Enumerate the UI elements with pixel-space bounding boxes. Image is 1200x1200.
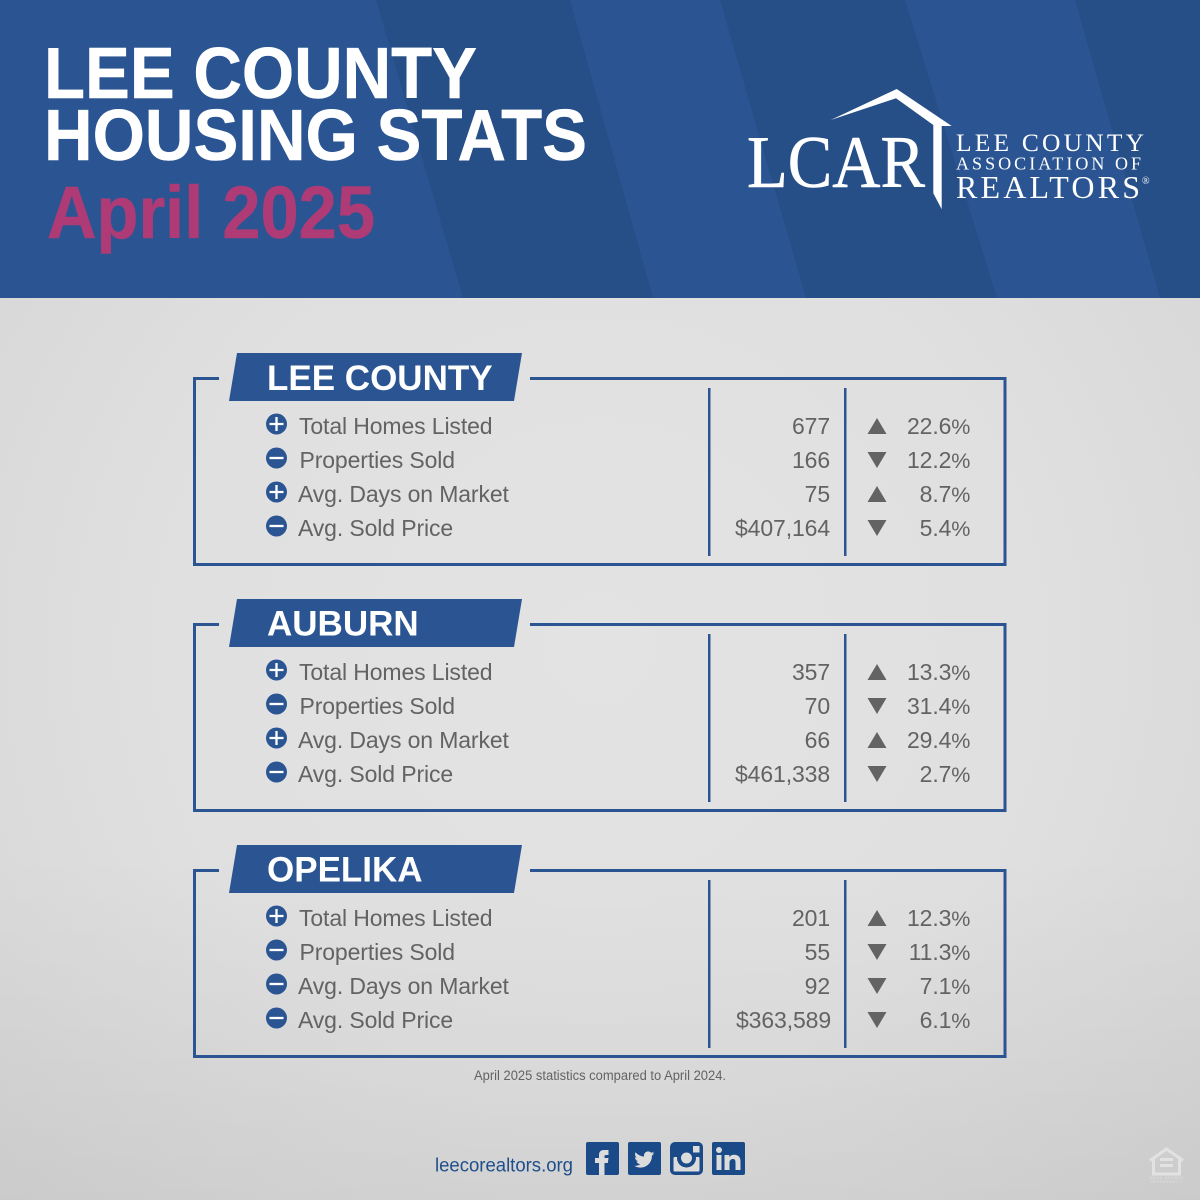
row: average days on market: 75 [805, 481, 830, 507]
title: HOUSING STATS [44, 96, 587, 176]
row: properties sold: Properties Sold [300, 939, 455, 965]
row: average days on market: 92 [805, 973, 830, 999]
logo: LCAR [747, 89, 1150, 209]
panel: Opelika [194, 845, 1005, 1056]
row: average days on market: Avg. Days on Market [298, 481, 510, 507]
row: total homes listed: 357 [792, 659, 830, 685]
row: total homes listed: 13.3% [907, 659, 970, 685]
row: total homes listed: Total Homes Listed [299, 905, 492, 931]
row: properties sold: 11.3% [909, 939, 970, 965]
row: average sold price: 2.7% [920, 761, 970, 787]
row: average days on market: 8.7% [920, 481, 970, 507]
icon: Twitter [628, 1142, 661, 1175]
heading: Lee County: LEE COUNTY [267, 359, 493, 398]
row: total homes listed [266, 413, 970, 439]
heading: Lee County [229, 353, 522, 401]
row: average days on market: Avg. Days on Market [298, 727, 510, 753]
header banner [0, 0, 1200, 298]
panel: Lee County [194, 353, 1005, 564]
heading: Auburn [229, 599, 522, 647]
subtitle: date: April 2025 [47, 171, 375, 254]
row: properties sold [266, 939, 970, 965]
row: average sold price: $461,338 [735, 761, 830, 787]
row: total homes listed: 12.3% [907, 905, 970, 931]
row: total homes listed [266, 905, 970, 931]
row: average sold price [266, 1007, 970, 1033]
row: average days on market [266, 727, 970, 753]
logo: LCAR: ® [1142, 176, 1150, 187]
row: total homes listed [266, 659, 970, 685]
row: average sold price [266, 515, 970, 541]
row: average sold price [266, 761, 970, 787]
icon: Instagram [670, 1142, 703, 1175]
row: properties sold: Properties Sold [300, 693, 455, 719]
logo: LCAR: REALTORS [956, 169, 1140, 205]
row: average sold price: 5.4% [920, 515, 970, 541]
row: properties sold: 166 [792, 447, 830, 473]
logo: LCAR: LEE COUNTY [956, 128, 1144, 157]
row: average days on market [266, 481, 970, 507]
row: average sold price: $363,589 [736, 1007, 831, 1033]
row: total homes listed: Total Homes Listed [299, 413, 492, 439]
row: properties sold: 12.2% [907, 447, 970, 473]
icon: equal housing opportunity: OPPORTUNITY [1150, 1180, 1184, 1184]
row: properties sold: 70 [805, 693, 830, 719]
website link: leecorealtors.org [435, 1156, 573, 1176]
icon: house roofline [831, 89, 952, 209]
panel: Auburn [194, 599, 1005, 810]
heading: Opelika [229, 845, 522, 893]
row: average days on market: 29.4% [907, 727, 970, 753]
row: average days on market [266, 973, 970, 999]
icon: LinkedIn [712, 1142, 745, 1175]
title: LEE COUNTY [44, 34, 477, 114]
row: average sold price: Avg. Sold Price [298, 1007, 453, 1033]
row: average days on market: 66 [805, 727, 830, 753]
row: total homes listed: Total Homes Listed [299, 659, 492, 685]
icon: Facebook [586, 1142, 619, 1175]
row: properties sold: 55 [805, 939, 830, 965]
row: properties sold [266, 693, 970, 719]
row: properties sold [266, 447, 970, 473]
logo: LCAR: ASSOCIATION OF [956, 154, 1141, 174]
row: total homes listed: 201 [792, 905, 830, 931]
row: average sold price: Avg. Sold Price [298, 761, 453, 787]
caption: comparison note: April 2025 statistics compared to April 2024. [474, 1068, 726, 1083]
title [44, 34, 587, 254]
row: total homes listed: 22.6% [907, 413, 970, 439]
row: properties sold: 31.4% [907, 693, 970, 719]
row: average sold price: Avg. Sold Price [298, 515, 453, 541]
heading: Auburn: AUBURN [267, 604, 419, 644]
icon: equal housing opportunity [1150, 1149, 1184, 1184]
row: average sold price: $407,164 [735, 515, 830, 541]
logo: LCAR: LCAR [747, 122, 926, 204]
row: average sold price: 6.1% [920, 1007, 970, 1033]
row: average days on market: 7.1% [920, 973, 970, 999]
row: average days on market: Avg. Days on Market [298, 973, 510, 999]
icon: equal housing opportunity: EQUAL HOUSING [1150, 1176, 1183, 1180]
row: properties sold: Properties Sold [300, 447, 455, 473]
heading: Opelika: OPELIKA [267, 850, 423, 890]
row: total homes listed: 677 [792, 413, 830, 439]
